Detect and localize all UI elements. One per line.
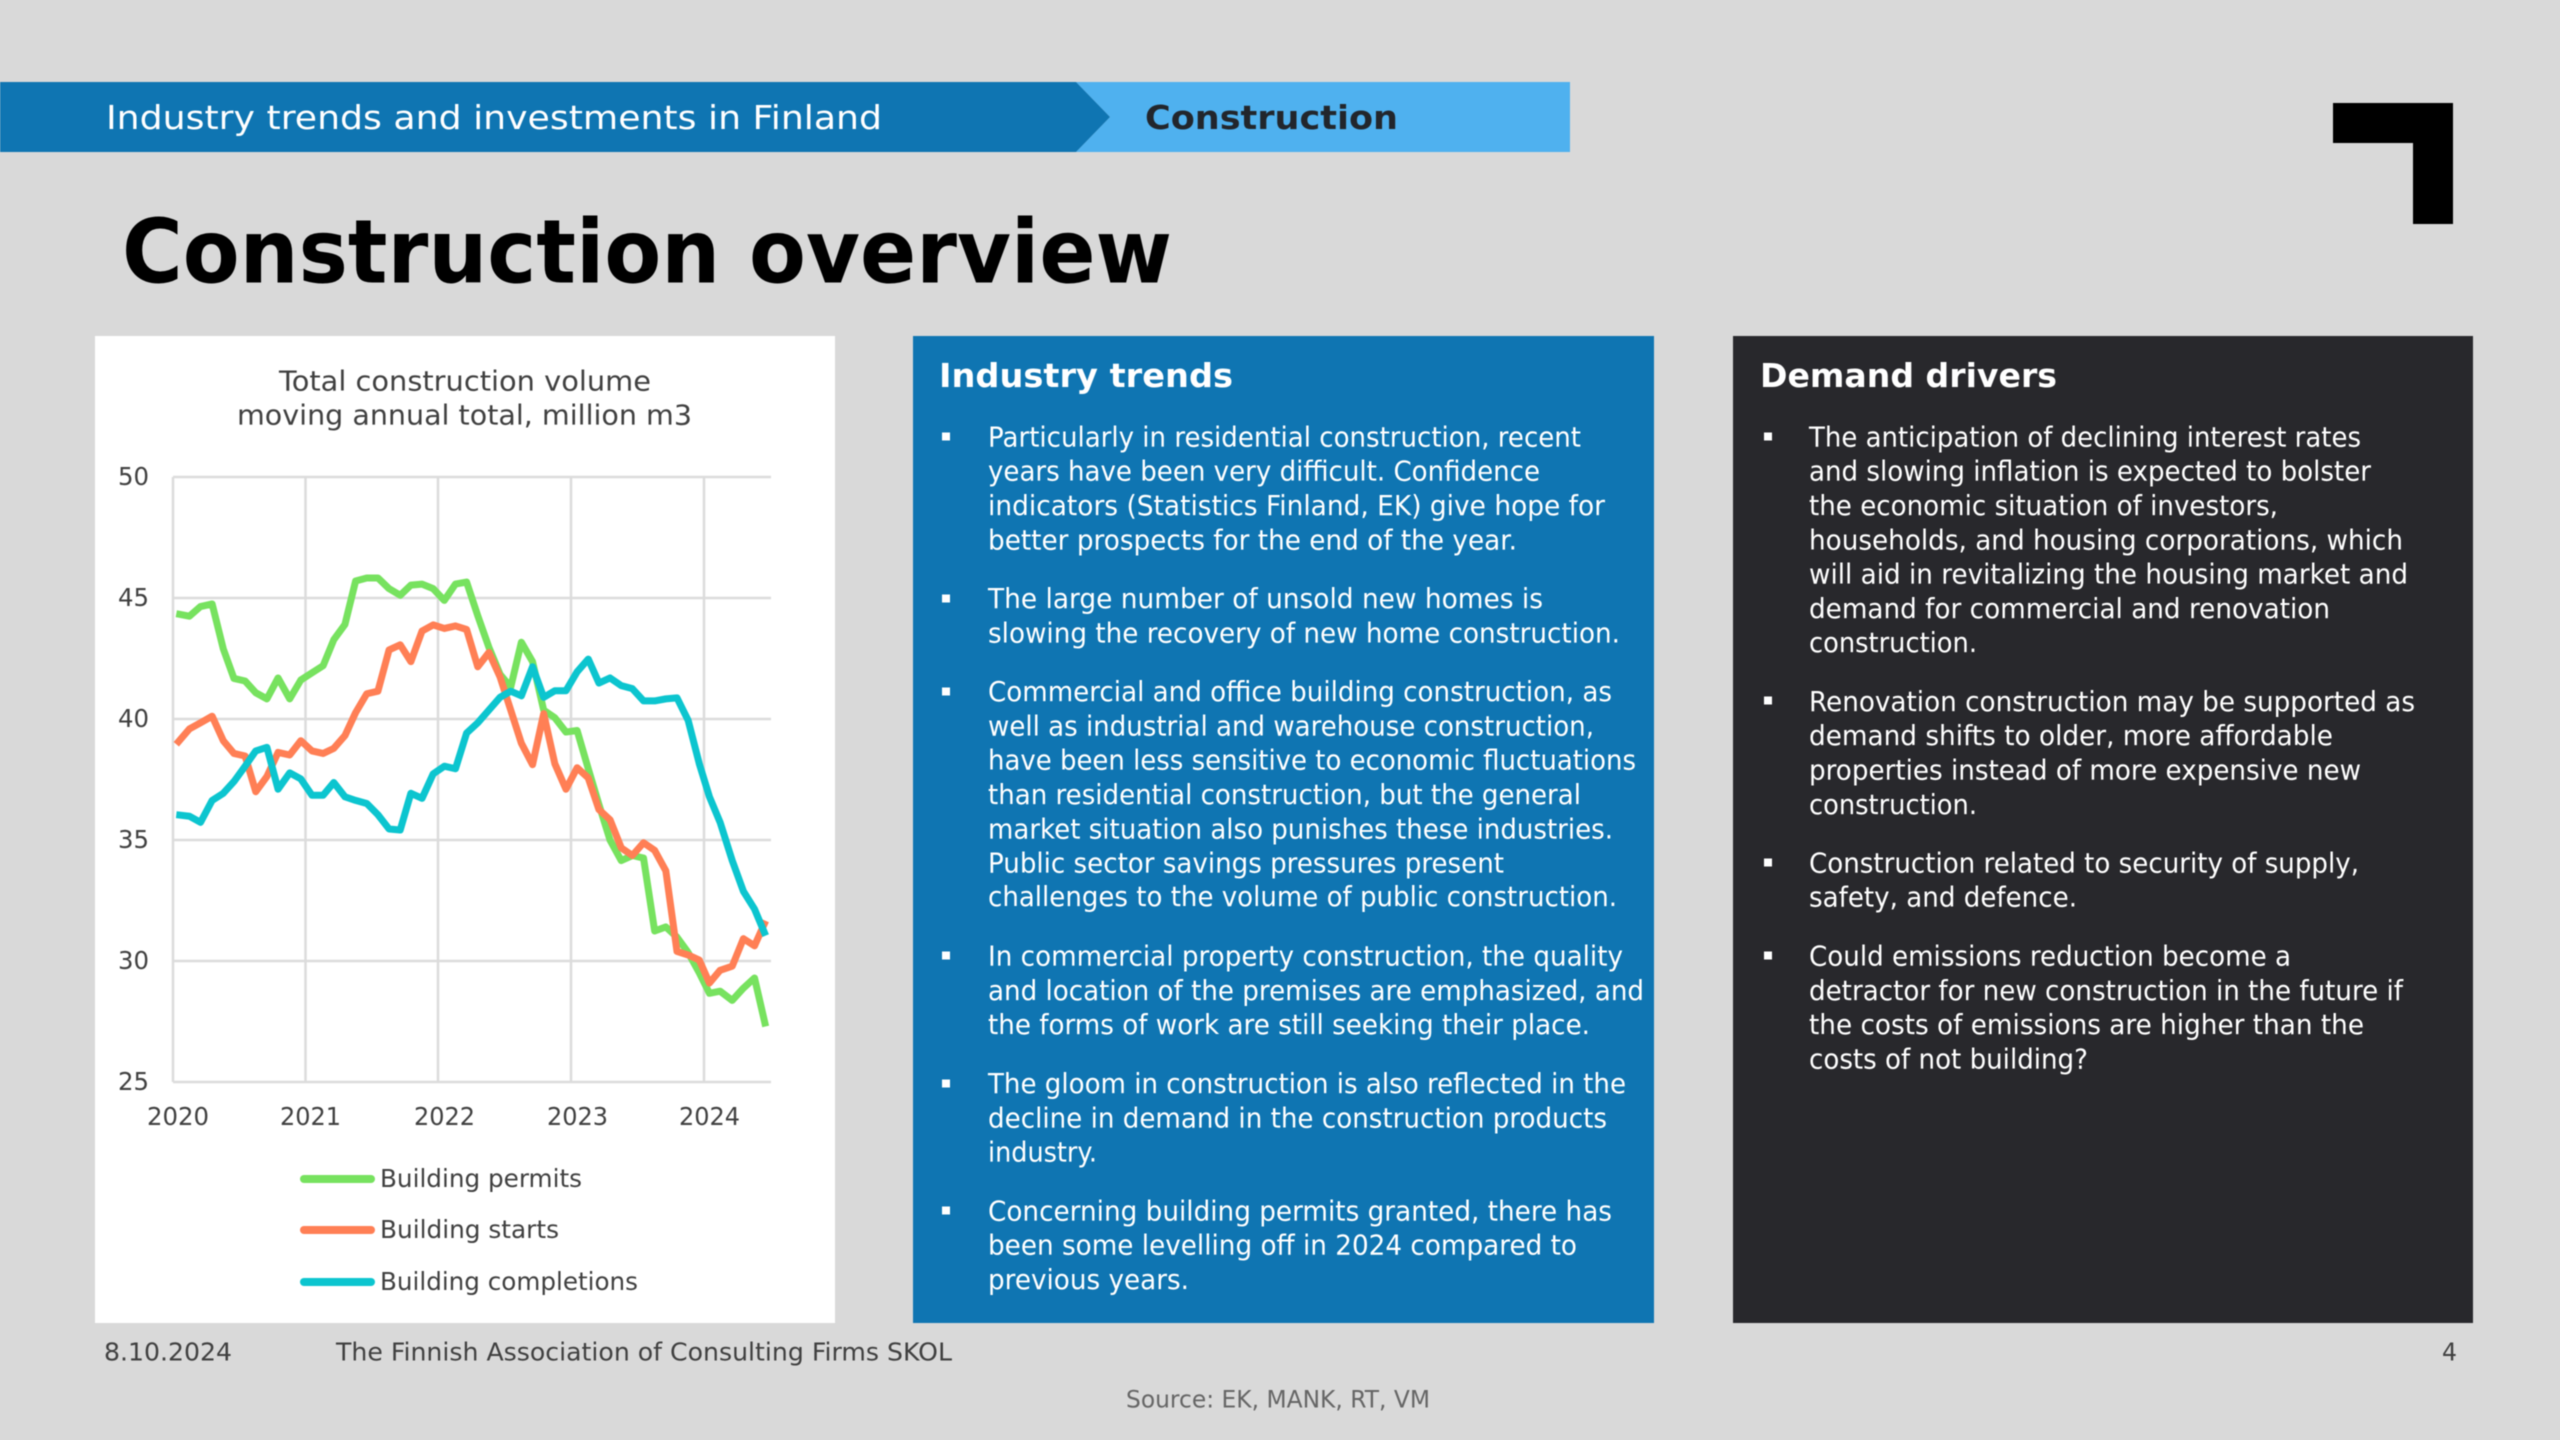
x axis labels xyxy=(147,1102,740,1131)
bullet: renovation: properties instead of more expensive new xyxy=(1809,754,2361,786)
x axis labels: 2022 xyxy=(414,1102,475,1131)
bullet: commercial and office: have been less sensitive to economic fluctuations xyxy=(988,744,1636,777)
series: building completions xyxy=(176,659,766,936)
y axis labels: 45 xyxy=(118,583,149,612)
bullet: building permits: Concerning building permits granted, there has xyxy=(988,1194,1612,1227)
bullet: construction products: industry. xyxy=(988,1136,1097,1169)
legend: building permits: Building permits xyxy=(380,1164,582,1193)
banner segment: section: Industry trends and investments in Finland xyxy=(106,98,882,137)
y axis labels xyxy=(118,462,149,1096)
heading: demand drivers: Demand drivers xyxy=(1760,356,2057,395)
legend xyxy=(304,1164,638,1296)
bullet: renovation: demand shifts to older, more affordable xyxy=(1809,719,2333,752)
bullet: emissions: Could emissions reduction become a xyxy=(1809,940,2291,973)
bullet: interest rates: demand for commercial and renovation xyxy=(1809,592,2330,625)
bullet: interest rates: the economic situation of investors, xyxy=(1809,489,2278,522)
bullet: commercial property: In commercial property construction, the quality xyxy=(988,940,1623,973)
series: building permits xyxy=(176,578,766,1026)
bullet: emissions xyxy=(1764,940,2404,1076)
bullet: interest rates: will aid in revitalizing the housing market and xyxy=(1809,558,2408,590)
icon: corner logo xyxy=(2333,103,2453,224)
bullet: residential: years have been very difficult. Confidence xyxy=(988,455,1540,488)
breadcrumb banner xyxy=(0,82,1570,152)
bullet: renovation: construction. xyxy=(1809,788,1977,821)
banner segment: section xyxy=(0,82,1570,152)
bullet: residential: indicators (Statistics Finland, EK) give hope for xyxy=(988,489,1605,522)
bullet: commercial and office: Public sector savings pressures present xyxy=(988,846,1504,880)
y axis labels: 50 xyxy=(118,462,149,491)
x axis labels: 2023 xyxy=(547,1102,608,1131)
footer date: 8.10.2024 xyxy=(104,1338,232,1366)
data series xyxy=(176,578,766,1026)
x axis labels: 2024 xyxy=(679,1102,740,1131)
bullet: unsold homes: slowing the recovery of new home construction. xyxy=(988,616,1620,649)
bullet: interest rates xyxy=(1764,420,2408,659)
y axis labels: 40 xyxy=(118,704,149,733)
bullet: commercial and office: than residential construction, but the general xyxy=(988,778,1581,811)
bullet: emissions: detractor for new construction in the future if xyxy=(1809,974,2404,1007)
bullet: residential: Particularly in residential construction, recent xyxy=(988,420,1581,454)
bullet: building permits: been some levelling off in 2024 compared to xyxy=(988,1229,1577,1262)
x axis labels: 2021 xyxy=(280,1102,341,1131)
bullet: security of supply: safety, and defence. xyxy=(1809,881,2077,914)
bullet: construction products: The gloom in construction is also reflected in the xyxy=(987,1067,1626,1100)
bullet list: demand drivers xyxy=(1764,420,2415,1076)
bullet: unsold homes: The large number of unsold new homes is xyxy=(987,582,1543,615)
chart title: Total construction volume xyxy=(278,364,651,398)
y axis labels: 30 xyxy=(118,946,149,975)
banner segment: current topic: Construction xyxy=(1145,98,1398,137)
y axis labels: 25 xyxy=(118,1067,149,1096)
title: Construction overview xyxy=(122,200,1172,304)
y axis labels: 35 xyxy=(118,825,149,854)
bullet: commercial and office: well as industrial and warehouse construction, xyxy=(988,710,1594,742)
bullet: unsold homes xyxy=(942,582,1620,649)
line chart xyxy=(118,462,771,1131)
bullet: residential xyxy=(942,420,1605,556)
bullet: residential: better prospects for the end of the year. xyxy=(988,523,1517,556)
bullet: renovation: Renovation construction may be supported as xyxy=(1809,685,2415,718)
bullet: commercial property: the forms of work are still seeking their place. xyxy=(988,1008,1590,1041)
bullet: interest rates: households, and housing corporations, which xyxy=(1809,523,2403,556)
legend: building completions: Building completions xyxy=(380,1267,638,1296)
panel: chart xyxy=(95,336,835,1323)
x axis labels: 2020 xyxy=(147,1102,209,1131)
footer organisation: The Finnish Association of Consulting Firms SKOL xyxy=(335,1338,952,1366)
panel: demand drivers xyxy=(1733,336,2473,1323)
chart title: moving annual total, million m3 xyxy=(237,398,692,432)
bullet: commercial property: and location of the premises are emphasized, and xyxy=(988,974,1644,1007)
page number: 4 xyxy=(2442,1338,2457,1366)
bullet: construction products xyxy=(942,1067,1626,1169)
bullet list: industry trends xyxy=(942,420,1644,1296)
source note: Source: EK, MANK, RT, VM xyxy=(1126,1386,1430,1414)
bullet: security of supply: Construction related to security of supply, xyxy=(1809,846,2359,880)
series: building starts xyxy=(176,625,766,983)
bullet: renovation xyxy=(1764,685,2415,821)
bullet: security of supply xyxy=(1764,846,2359,914)
bullet: building permits: previous years. xyxy=(988,1263,1189,1296)
chart title xyxy=(237,364,692,432)
bullet: building permits xyxy=(942,1194,1612,1296)
legend: building starts: Building starts xyxy=(380,1215,559,1244)
bullet: construction products: decline in demand in the construction products xyxy=(988,1101,1607,1134)
bullet: commercial property xyxy=(942,940,1644,1041)
panel: industry trends xyxy=(913,336,1654,1323)
bullet: commercial and office: market situation also punishes these industries. xyxy=(988,812,1613,845)
bullet: commercial and office xyxy=(942,675,1636,913)
bullet: emissions: the costs of emissions are higher than the xyxy=(1809,1008,2364,1041)
heading: industry trends: Industry trends xyxy=(939,356,1233,395)
bullet: interest rates: and slowing inflation is expected to bolster xyxy=(1809,455,2371,488)
bullet: interest rates: construction. xyxy=(1809,626,1977,659)
bullet: interest rates: The anticipation of declining interest rates xyxy=(1808,420,2361,454)
bullet: commercial and office: challenges to the volume of public construction. xyxy=(988,880,1617,913)
bullet: emissions: costs of not building? xyxy=(1809,1042,2088,1076)
bullet: commercial and office: Commercial and office building construction, as xyxy=(988,675,1612,708)
